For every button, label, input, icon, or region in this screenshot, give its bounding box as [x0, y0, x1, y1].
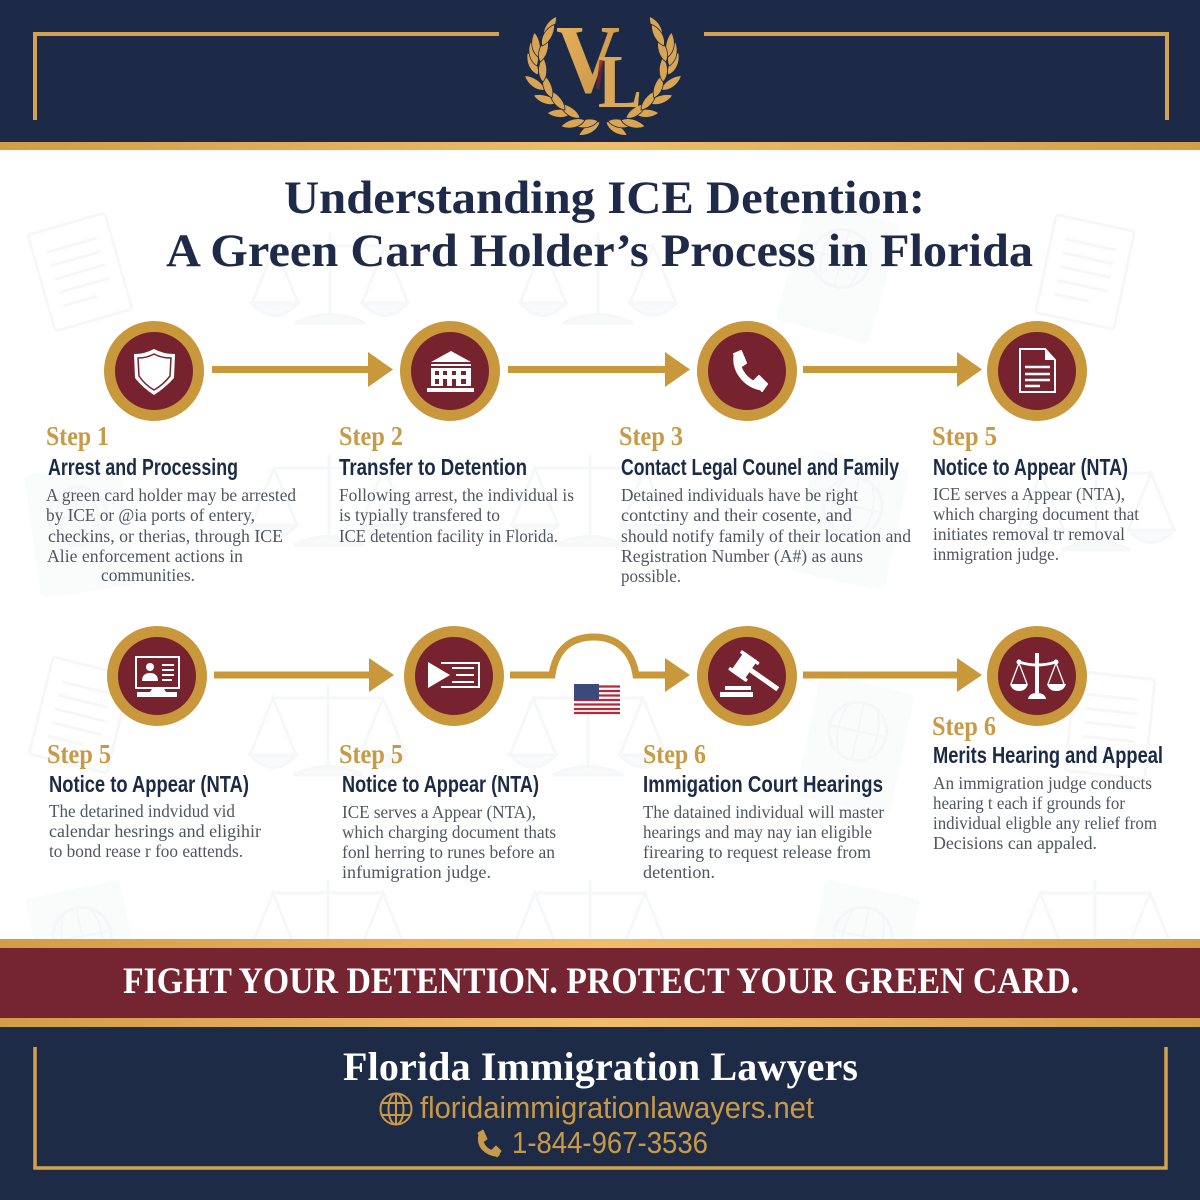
step 5 description: inmigration judge.	[933, 544, 1059, 564]
title	[166, 172, 1033, 277]
icon: footer telephone	[478, 1130, 501, 1157]
step 2 description: Following arrest, the individual is	[339, 485, 574, 505]
icon: notice card	[410, 632, 498, 720]
step 6 panel: Immigation Court Hearings: Step 6	[643, 739, 706, 769]
step 6 panel: Merits Hearing and Appeal	[932, 632, 1163, 853]
description: Decisions can appaled.	[933, 833, 1097, 853]
step 5 panel: Notice to Appear (NTA): Step 5	[932, 421, 997, 451]
step 1 description: by ICE or @ia ports of entery,	[46, 505, 255, 525]
phone number: 1-844-967-3536	[512, 1125, 708, 1160]
call-to-action banner: FIGHT YOUR DETENTION. PROTECT YOUR GREEN CARD.	[123, 961, 1079, 1002]
logo: VL laurel wreath: L	[598, 40, 642, 124]
icon: American flag	[574, 684, 620, 714]
icon: computer profile	[112, 632, 202, 720]
description: An immigration judge conducts	[933, 773, 1152, 793]
description: which charging document thats	[342, 822, 556, 842]
icon: globe	[380, 1094, 412, 1124]
step 2 panel: Transfer to Detention: Transfer to Detention	[339, 454, 527, 480]
step 6 panel: Immigation Court Hearings	[643, 632, 884, 882]
icon: scales of justice	[992, 632, 1082, 720]
row 2 panel: Notice to Appear, detained individual	[47, 632, 261, 861]
step 1 description: checkins, or therias, through ICE	[48, 526, 283, 546]
step 3 description: Detained individuals have be right	[621, 485, 858, 505]
arrow: row 2 first	[214, 658, 394, 692]
title: A Green Card Holder’s Process in Florida	[166, 225, 1033, 277]
step 5 description: initiates removal tr removal	[933, 524, 1125, 544]
step 1 description	[46, 485, 296, 585]
description: The datained individual will master	[643, 802, 884, 822]
row 2 panel: Notice to Appear, detained individual: Step 5	[47, 739, 111, 769]
description	[342, 802, 556, 882]
logo: VL laurel wreath	[522, 6, 684, 139]
step 2 description	[339, 485, 574, 546]
step 3 panel: Contact Legal Counel and Family: Contact Legal Counel and Family	[621, 454, 899, 480]
arrow: step 2 to 3	[508, 352, 690, 387]
step 3 panel: Contact Legal Counel and Family: Step 3	[619, 421, 683, 451]
arrow: curved over flag	[510, 637, 690, 692]
call-to-action banner	[0, 939, 1200, 1027]
icon: shield	[110, 326, 198, 416]
description: firearing to request release from	[643, 842, 871, 862]
step 1 panel: Arrest and Processing	[46, 326, 296, 585]
step 5 description: which charging document that	[933, 504, 1139, 524]
step 1 description: communities.	[101, 565, 195, 585]
row 2 panel: Notice to Appear, detained individual: Notice to Appear (NTA)	[49, 771, 249, 797]
step 2 panel: Transfer to Detention	[339, 326, 574, 546]
step 1 description: A green card holder may be arrested	[46, 485, 296, 505]
description: ICE serves a Appear (NTA),	[342, 802, 536, 822]
step 3 description: contctiny and their cosente, and	[621, 505, 852, 525]
step 5 panel: Notice to Appear (NTA)	[932, 326, 1139, 564]
description	[49, 801, 261, 861]
step 3 description	[621, 485, 911, 586]
description	[933, 773, 1157, 853]
logo: VL laurel wreath: V	[556, 6, 620, 114]
step 5 description: ICE serves a Appear (NTA),	[933, 484, 1125, 504]
step 5 panel: Notice to Appear (NTA): Notice to Appear (NTA)	[933, 454, 1128, 480]
step 6 panel: Immigation Court Hearings: Immigation Court Hearings	[643, 771, 883, 797]
row 2 panel: Notice to Appear, ICE serves: Notice to Appear (NTA)	[342, 771, 539, 797]
icon: telephone	[702, 326, 792, 416]
description: hearing t each if grounds for	[933, 793, 1125, 813]
arrow: step 1 to 2	[212, 352, 393, 387]
footer panel	[0, 1027, 1200, 1200]
description: The detarined indvidud vid	[49, 801, 235, 821]
icon: gavel	[702, 632, 792, 720]
step 2 description: is typially transfered to	[339, 505, 500, 525]
step 1 panel: Arrest and Processing: Step 1	[46, 421, 109, 451]
step 6 panel: Merits Hearing and Appeal: Step 6	[932, 711, 996, 741]
step 3 description: Registration Number (A#) as auns	[621, 546, 863, 566]
step 1 panel: Arrest and Processing: Arrest and Processing	[48, 454, 238, 480]
header band	[0, 0, 1200, 150]
arrow: step 3 to 5	[803, 352, 982, 387]
description: to bond rease r foo eattends.	[49, 841, 243, 861]
title: Understanding ICE Detention:	[284, 172, 925, 224]
description: calendar hesrings and eligihir	[49, 821, 261, 841]
background watermark pattern	[24, 200, 1174, 1021]
step 1 description: Alie enforcement actions in	[47, 546, 243, 566]
description: detention.	[643, 862, 715, 882]
description: individual eligble any relief from	[933, 813, 1157, 833]
step 2 description: ICE detention facility in Florida.	[339, 526, 558, 546]
step 3 description: should notify family of their location and	[621, 526, 911, 546]
description: infumigration judge.	[342, 862, 491, 882]
step 2 panel: Transfer to Detention: Step 2	[339, 421, 403, 451]
icon: courthouse	[406, 326, 494, 416]
description	[643, 802, 884, 882]
website: floridaimmigrationlawayers.net	[420, 1090, 814, 1125]
icon: document	[992, 326, 1082, 416]
step 3 panel: Contact Legal Counel and Family	[619, 326, 911, 586]
step 5 description	[933, 484, 1139, 564]
row 2 panel: Notice to Appear, ICE serves	[339, 632, 556, 882]
firm name: Florida Immigration Lawyers	[343, 1044, 858, 1089]
row 2 panel: Notice to Appear, ICE serves: Step 5	[339, 739, 403, 769]
description: fonl herring to runes before an	[342, 842, 555, 862]
step 3 description: possible.	[621, 566, 681, 586]
description: hearings and may nay ian eligible	[643, 822, 872, 842]
arrow: row 2 last	[803, 658, 982, 692]
